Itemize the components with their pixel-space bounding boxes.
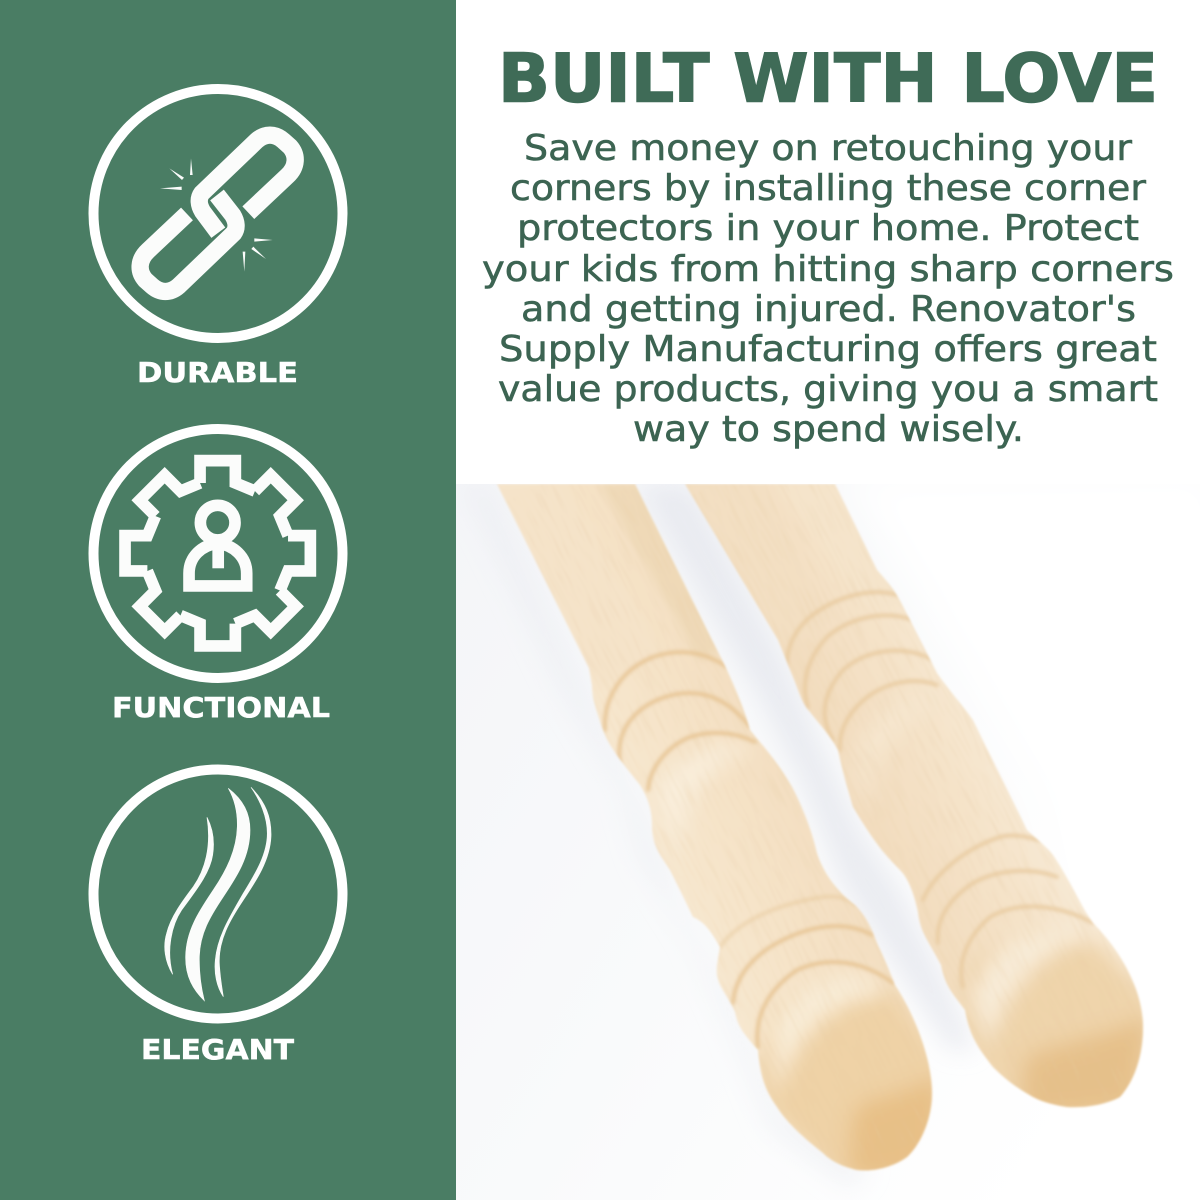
text block: description: and getting injured. Renovator's: [521, 289, 1136, 330]
text block: description: protectors in your home. Protect: [517, 208, 1139, 249]
text block: description: corners by installing these corner: [510, 168, 1146, 209]
title: BUILT WITH LOVE: [498, 40, 1158, 118]
text block: description: [482, 128, 1174, 450]
label: functional: FUNCTIONAL: [112, 691, 330, 724]
text block: description: Save money on retouching your: [524, 128, 1132, 169]
photo: two wooden spindles: [456, 484, 1144, 1180]
icon: gear with person in circle: [94, 429, 342, 678]
icon: broken chain link in circle: [94, 89, 342, 338]
feature: functional: [94, 429, 342, 724]
text block: description: way to spend wisely.: [633, 409, 1024, 450]
spindle: left: [496, 484, 934, 1172]
label: elegant: ELEGANT: [141, 1033, 294, 1066]
text block: description: value products, giving you a smart: [498, 369, 1158, 410]
feature: durable: [94, 89, 342, 389]
panel: green sidebar: [0, 0, 456, 1200]
text block: description: your kids from hitting sharp corners: [482, 249, 1174, 290]
icon: flowing waves in circle: [94, 770, 342, 1018]
spindle: right: [684, 484, 1144, 1109]
text block: description: Supply Manufacturing offers great: [499, 329, 1157, 370]
label: durable: DURABLE: [137, 356, 298, 389]
feature: elegant: [94, 770, 342, 1066]
